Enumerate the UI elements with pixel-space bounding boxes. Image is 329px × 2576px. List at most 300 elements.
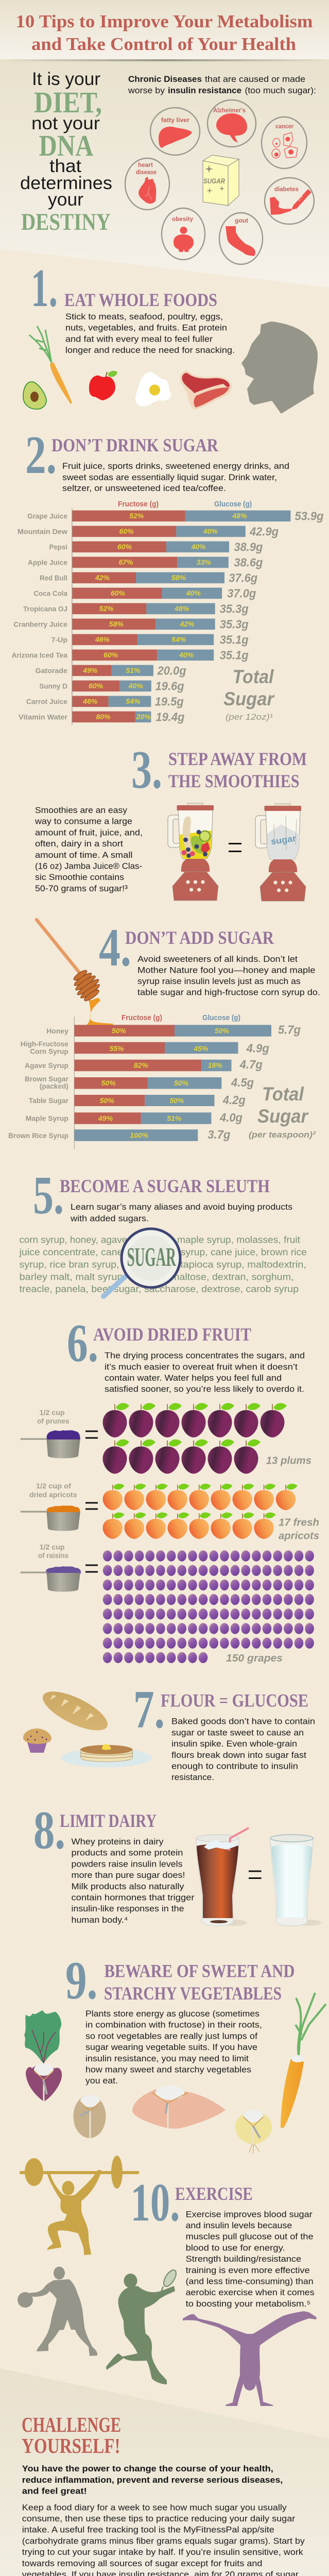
bar: 7-up: 46% [95,635,110,643]
icon: cup of prunes [21,1430,80,1458]
bar: mountain dew: 42.9g [249,524,279,538]
bar: high-fructose corn syrup: 55% [110,1044,124,1053]
body text: Baked goods don’t have to contain [171,1717,315,1726]
legend: Glucose (g) [214,500,252,509]
bar: sunny d: Sunny D [39,682,67,690]
comparison: prunes vs plums [21,1403,311,1473]
chart caption: Sugar [223,688,275,709]
heading: BECOME A SUGAR SLEUTH [60,1176,270,1196]
body text: Mother Nature fool you—honey and maple [137,965,315,975]
body text: how many sweet and starchy vegetables [85,2065,251,2074]
body text: intake. A useful free tracking tool is the MyFitnessPal app/site [22,2526,274,2535]
icon: steak [180,370,232,410]
label [29,1482,77,1499]
label: 1/2 cup [40,1543,65,1551]
disease: heart disease: heart [138,161,153,168]
bar: brown rice syrup: 100% [130,1131,149,1139]
body text: in combination with fructose) in their roots, [85,2021,262,2030]
bar chart: total sugar per teaspoon [8,1013,316,1149]
heading: STEP AWAY FROM [168,749,307,769]
bar: vitamin water: 80% [96,713,111,721]
bar: mountain dew: Mountain Dew [18,528,67,536]
heading [168,749,307,791]
tip 4: don't add sugar [37,917,320,1026]
bar: brown sugar: 4.5g [231,1076,254,1089]
bar: cranberry juice [13,617,249,631]
body text: you eat. [85,2076,118,2086]
icon: magnifying glass: SUGAR [127,1243,177,1272]
disease: gout: gout [235,217,248,224]
equals sign [85,1502,98,1510]
body text: Exercise improves blood sugar [186,2210,313,2219]
bar: apple juice: Apple Juice [28,558,67,567]
bar: 7-up: 7-Up [51,636,67,644]
bar: red bull: 58% [171,573,186,582]
number 9: 9. [65,1950,98,2010]
sugar aliases list [19,1234,307,1294]
sugar aliases list: tapioca syrup, maltodextrin, [180,1259,306,1270]
icon: onion in a suit [235,2110,272,2154]
equals sign [229,843,241,852]
disease: diabetes: 170 [296,194,304,202]
body text: Fruit juice, sports drinks, sweetened energy drinks, and [62,462,289,471]
bar: high-fructose corn syrup: Corn Syrup [30,1047,68,1056]
chart caption: Total [262,1083,304,1105]
intro panel background [0,59,329,287]
title [15,11,313,54]
bar: carrot juice: Carrot Juice [26,698,67,706]
icon: head silhouette [241,321,318,414]
label [37,1409,70,1425]
disease: fatty liver: fatty liver [161,116,189,124]
label: of prunes [37,1417,70,1425]
body text: powders raise insulin levels [71,1859,182,1869]
label: 1/2 cup of [36,1482,71,1490]
bar: agave syrup: 4.7g [239,1058,263,1071]
body text: and insulin levels because [186,2221,292,2230]
body text: flours break down into sugar fast [171,1751,306,1760]
body text: resistance. [171,1773,214,1782]
icon: sugar box [203,155,239,206]
body text [71,1837,195,1925]
bar: arizona iced tea: 40% [179,651,194,659]
disease: obesity: obesity [172,215,193,223]
chronic diseases heading [128,75,316,95]
bar: table sugar [29,1093,246,1107]
slogan: diet not dna: not your [31,113,100,133]
body text [85,2009,262,2086]
bar: high-fructose corn syrup [21,1040,269,1056]
body text: sugar wearing vegetable suits. If you have [85,2043,257,2052]
bar: grape juice [27,509,323,522]
body text: consume, then use these tips to practice reducing your daily sugar [22,2514,296,2523]
bar: maple syrup: 51% [167,1114,182,1122]
body text: syrup raise insulin levels just as much as [137,977,301,986]
bar: red bull: Red Bull [40,574,67,582]
body text: it’s much easier to overeat fruit when it doesn’t [105,1362,298,1371]
slogan: diet not dna: that [49,156,81,176]
bar: carrot juice [26,694,184,708]
bold statement: You have the power to change the course of your health, [22,2464,273,2473]
bar: apple juice [28,555,263,569]
body text: insulin-like responses in the [71,1904,184,1913]
icon: glass of milk [270,1835,321,1926]
body text: enough to contribute to insulin [171,1762,298,1771]
bar: table sugar: 50% [169,1096,184,1105]
body text: more than pure sugar does! [71,1871,185,1880]
bar: grape juice: 52% [129,512,144,520]
bar: apple juice: 38.6g [234,555,263,569]
body text [34,806,143,893]
bar: pepsi: 40% [191,543,206,551]
bar: coca cola: 40% [186,589,201,597]
bar: cranberry juice: 42% [179,620,195,628]
body text: contain hormones that trigger [71,1893,195,1902]
disease: heart disease: disease [136,168,157,176]
bar: brown rice syrup: 3.7g [207,1128,230,1141]
bar: cranberry juice: 58% [109,620,124,628]
bar: maple syrup [26,1111,243,1124]
icon: weightlifter silhouette [20,2156,139,2255]
bar: mountain dew: 60% [119,527,134,535]
icon: magnifying glass [103,1229,180,1296]
bar: honey: 50% [215,1026,230,1035]
body text: blood to use for energy. [186,2243,285,2252]
bar: arizona iced tea: 35.1g [220,648,249,662]
bold statement: reduce inflammation, prevent and reverse serious diseases, [22,2475,283,2485]
heading: AVOID DRIED FRUIT [93,1324,251,1345]
body text: products and some protein [71,1849,183,1858]
disease: heart disease [125,158,169,210]
tip 5: become a sugar sleuth [19,1165,307,1296]
bar: red bull [40,571,257,584]
body text: Avoid sweeteners of all kinds. Don’t let [137,955,298,964]
sugar aliases list: corn syrup, honey, agave, [20,1234,130,1245]
body text: Keep a food diary for a week to see how much sugar you usually [22,2503,287,2512]
bar: pepsi: Pepsi [49,543,67,551]
bar: 7-up: 35.1g [220,633,249,646]
bar: tropicana oj [23,602,249,615]
sugar aliases list: juice concentrate, cane [19,1247,123,1258]
body text: with added sugars. [70,1214,149,1224]
heading: LIMIT DAIRY [60,1810,157,1831]
slogan: diet not dna: DESTINY [21,209,111,235]
body text: satisfied sooner, so you’re less likely to overdo it. [105,1385,304,1394]
comparison: dried apricots vs fresh [21,1482,319,1542]
disease: diabetes: diabetes [274,185,299,193]
slogan: diet not dna: It is your [32,69,100,89]
body text: insulin spike. Even whole-grain [171,1739,297,1749]
bar: table sugar: Table Sugar [29,1096,68,1105]
heading: DON’T ADD SUGAR [125,927,274,948]
body text: contain water. Water helps you feel full and [105,1374,282,1383]
body text: sic Smoothie contains [35,873,124,882]
chart caption: (per 12oz)¹ [226,712,273,722]
title: and Take Control of Your Health [31,34,296,54]
body text: Stick to meats, seafood, poultry, eggs, [65,312,223,321]
chart caption [249,1083,316,1140]
challenge panel [0,2368,329,2576]
heading: STARCHY VEGETABLES [104,1983,282,2004]
body text [65,312,235,355]
bar: honey: Honey [46,1027,68,1035]
tip 10: exercise [18,2156,317,2406]
bar: cranberry juice: 35.3g [220,617,249,631]
bar: vitamin water: Vitamin Water [19,713,68,721]
equals sign [85,1564,98,1572]
bar: brown rice syrup [8,1128,230,1141]
number 3: 3. [131,739,162,800]
challenge heading: CHALLENGE [22,2413,121,2436]
tip 8: limit dairy [33,1800,321,1926]
bar: coca cola [33,586,256,600]
bar: mountain dew [18,524,279,538]
icon: glass of cola [196,1828,249,1926]
bar: brown sugar: 50% [101,1079,116,1087]
bar: gatorade: Gatorade [36,667,67,675]
bar: high-fructose corn syrup: 4.9g [246,1042,269,1055]
heading: EAT WHOLE FOODS [64,290,217,310]
body text: muscles pull glucose out of the [186,2232,314,2242]
body text: (16 oz) Jamba Juice® Clas- [35,861,142,871]
icon: potato in a suit [73,2095,106,2138]
label: 1/2 cup [40,1409,65,1417]
challenge heading: YOURSELF! [22,2434,120,2458]
body text: (and less time-consuming) than [186,2277,314,2286]
bar: tropicana oj: 48% [174,604,189,613]
bar: brown sugar: 50% [174,1079,189,1087]
chronic diseases heading: worse by [128,86,165,95]
tip 2: don't drink sugar [25,425,289,493]
heading: THE SMOOTHIES [168,771,300,791]
icon: cup of dried apricots [21,1505,80,1531]
body text: Strength building/resistance [186,2255,301,2264]
bar: sunny d: 60% [89,682,103,690]
body text: longer and reduce the need for snacking. [65,346,235,355]
tip 9: beware of sweet and starchy vegetables [24,1950,326,2154]
chart caption: Sugar [257,1106,309,1127]
body text: aerobic exercise when it comes [186,2288,315,2297]
label: dried apricots [29,1490,77,1499]
body text: way to consume a large [34,817,132,826]
tip 1: eat whole foods [23,258,318,414]
chart caption: (per teaspoon)² [249,1130,316,1140]
17 apricots [103,1484,298,1539]
caption: 17 fresh [279,1517,319,1529]
icon: blender with sugar: sugar [270,834,297,846]
bar: grape juice: 48% [232,512,247,520]
icon: apple [89,371,117,400]
legend: Fructose (g) [118,500,159,509]
icon: honey dipper [37,920,113,1026]
bar: grape juice: 53.9g [295,509,323,522]
sugar aliases list: maltose, dextran, sorghum, [171,1272,293,1282]
body text: table sugar and high-fructose corn syrup do. [137,988,320,997]
body text: Smoothies are an easy [35,806,128,815]
bar: cranberry juice: Cranberry Juice [13,620,67,629]
bar: gatorade: 20.0g [157,664,186,677]
icon: avocado [23,382,46,409]
bar: brown sugar: (packed) [40,1082,68,1090]
bar: coca cola: 37.0g [227,586,256,600]
title: 10 Tips to Improve Your Metabolism [15,11,313,31]
body text [22,2503,305,2576]
chart caption [223,666,275,722]
label [38,1543,68,1560]
disease: diabetes [265,178,314,224]
body text: Plants store energy as glucose (sometimes [85,2009,259,2019]
bar: arizona iced tea: 60% [103,651,118,659]
body text [137,955,320,997]
bar: table sugar: 4.2g [222,1093,246,1107]
chronic diseases heading: that are caused or made [205,75,305,84]
tip 6: avoid dried fruit [21,1313,319,1664]
icon: muffin [23,1728,51,1753]
bold statement [22,2464,283,2496]
icon: basketball silhouette [18,2267,97,2356]
chronic diseases heading: insulin resistance [168,86,241,95]
bar: carrot juice: 54% [126,697,141,705]
body text: (carbohydrate grams minus fiber grams equals sugar grams). Start by [22,2536,305,2546]
slogan: diet not dna: determines [20,173,112,193]
bar: gatorade: 51% [126,666,141,674]
body text: towards removing all sources of sugar except for fruits and [22,2559,262,2568]
body text: Learn sugar’s many aliases and avoid buying products [71,1202,292,1212]
body text: Whey proteins in dairy [71,1837,164,1846]
body text: amount of time. A small [35,851,133,860]
disease: cancer [262,117,307,168]
body text: so root vegetables are really just lumps of [85,2031,257,2041]
body text: 50-70 grams of sugar!³ [35,884,128,893]
bar: red bull: 42% [95,573,110,582]
caption: 150 grapes [226,1653,283,1664]
bar: pepsi: 38.9g [234,540,263,553]
chronic diseases heading: (too much sugar): [245,86,316,95]
icon: carrot [29,326,72,404]
icon: handstand silhouette [183,2311,317,2406]
body text: often, dairy in a short [35,839,123,849]
title band background [0,0,329,59]
challenge heading [22,2413,121,2458]
body text [62,462,289,493]
bar: vitamin water [19,710,184,723]
body text: and fat with every meal to feel fuller [65,334,213,344]
bar: high-fructose corn syrup: 45% [193,1044,209,1053]
number 4: 4. [99,917,131,977]
bar: apple juice: 33% [197,558,211,566]
150 grapes [103,1550,314,1663]
label: of raisins [38,1551,68,1560]
body text: seltzer, or unsweetened iced tea/coffee. [62,484,226,493]
bar: tropicana oj: 35.3g [220,602,249,615]
legend: Glucose (g) [202,1013,240,1022]
body text: The drying process concentrates the sugars, and [105,1351,305,1361]
bar: carrot juice: 19.5g [155,694,184,708]
bar: brown rice syrup: Brown Rice Syrup [8,1131,68,1140]
number 7: 7. [133,1679,165,1739]
body text: Milk products also naturally [71,1882,184,1891]
bar: gatorade: 49% [82,666,98,674]
sugar aliases list: treacle, panela, beet sugar, saccharose, dextrose, carob syrup [20,1283,299,1294]
icon: blender with sugar [255,804,306,901]
chart caption: Total [233,666,274,687]
disease: cancer: cancer [275,123,293,130]
bar chart: total sugar per 12oz [12,500,324,725]
body text: human body.⁴ [71,1916,128,1925]
bar: honey: 5.7g [278,1023,301,1037]
bar: tropicana oj: 52% [99,604,114,613]
body text: nuts, vegetables, and fruits. Eat protein [65,324,227,333]
bar: pepsi [49,540,263,553]
bar: apple juice: 67% [118,558,133,566]
bold statement: and feel great! [22,2486,87,2496]
body text [70,1202,292,1224]
icon: tennis player silhouette [106,2268,179,2384]
band shadow [0,59,329,61]
bar: coca cola: 60% [111,589,126,597]
bar: 7-up: 54% [171,635,186,643]
sugar aliases list: barley malt, malt syrup [20,1272,123,1282]
equals sign [249,1870,262,1879]
number 6: 6. [67,1313,98,1373]
disease: fatty liver [150,108,200,155]
caption: 13 plums [266,1455,311,1467]
comparison: raisins vs grapes [21,1543,314,1664]
body text: amount of fruit, juice, and, [35,828,143,837]
bar: gatorade [36,664,186,677]
heading: EXERCISE [175,2183,253,2204]
tip 7: flour = glucose [23,1679,315,1782]
body text: trying to cut your sugar intake by half. If you’re insulin sensitive, work [22,2548,304,2557]
bar: sunny d: 40% [128,682,143,690]
legend [118,500,252,509]
body text [171,1717,315,1782]
caption [279,1517,319,1542]
bar: brown sugar [25,1075,254,1090]
icon: fried egg [135,372,171,406]
icon: pancakes on plate [61,1744,151,1767]
bar: agave syrup: Agave Syrup [25,1061,68,1070]
icon: cup of raisins [21,1566,81,1592]
slogan: diet not dna: DIET, [34,86,102,119]
caption: apricots [279,1531,319,1542]
diagram: diseases around sugar [125,100,314,264]
heading: BEWARE OF SWEET AND [104,1961,295,1981]
icon: beet in a suit [24,2010,62,2102]
legend [122,1013,240,1022]
icon: blender with fruit [168,803,218,901]
bar: agave syrup: 82% [134,1061,148,1070]
bar: agave syrup [25,1058,263,1071]
body text: training is even more effective [186,2266,310,2275]
disease: alzheimer's [207,100,256,147]
chronic diseases heading: Chronic Diseases [128,75,202,84]
body text [186,2210,315,2309]
bar: pepsi: 60% [117,543,132,551]
bar: maple syrup: Maple Syrup [26,1114,68,1123]
body text [105,1351,305,1394]
bar: mountain dew: 40% [203,527,218,535]
bar: agave syrup: 18% [208,1061,222,1070]
body text: to boosting your metabolism.⁵ [186,2299,310,2309]
bar: table sugar: 50% [100,1096,114,1105]
bar: high-fructose corn syrup: High-Fructose [21,1040,68,1048]
bar: honey [46,1023,301,1037]
number 5: 5. [33,1165,64,1225]
icon: carrot in a suit [281,1993,326,2128]
bar: vitamin water: 20% [136,713,151,721]
icon: sugar box: SUGAR [203,177,226,185]
